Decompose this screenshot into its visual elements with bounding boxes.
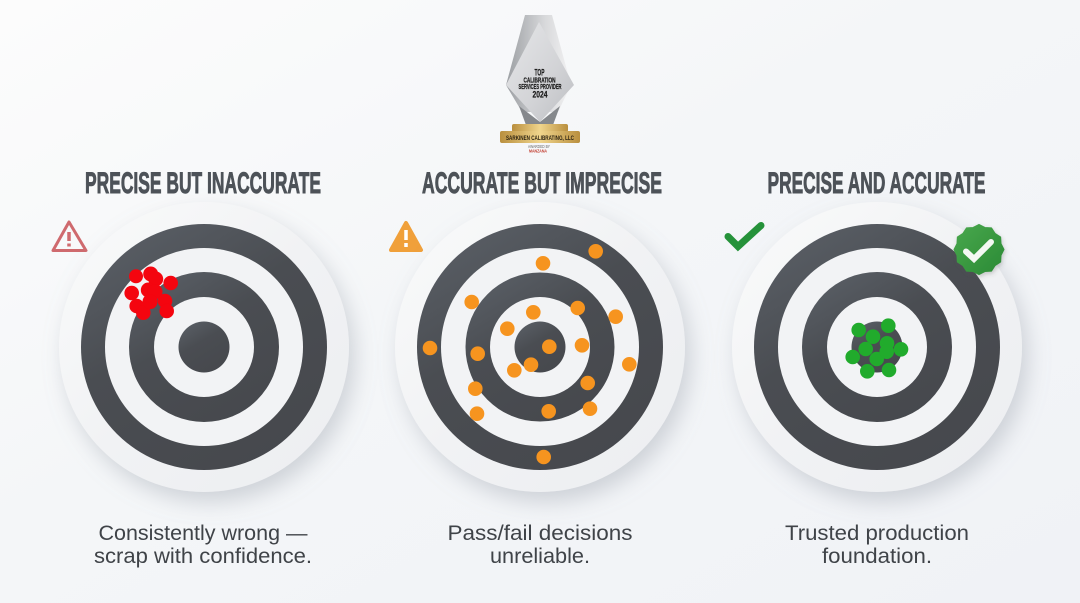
award trophy: SERVICES PROVIDER bbox=[518, 84, 562, 91]
award trophy: CALIBRATION bbox=[524, 76, 556, 84]
caption: consistently wrong: scrap with confidence. bbox=[94, 544, 312, 568]
target: red cluster off-center bbox=[59, 202, 349, 492]
award trophy: MANZANA bbox=[529, 148, 548, 154]
caption: consistently wrong: Consistently wrong — bbox=[98, 521, 308, 545]
caption: pass/fail: Pass/fail decisions bbox=[448, 521, 632, 545]
heading: accurate but imprecise: ACCURATE BUT IMPRECISE bbox=[422, 167, 662, 200]
award trophy bbox=[500, 15, 580, 154]
panel: precise but inaccurate bbox=[53, 167, 349, 568]
icon: green check bbox=[728, 226, 761, 246]
heading: precise but inaccurate: PRECISE BUT INACCURATE bbox=[85, 167, 321, 200]
award trophy: AWARDED BY bbox=[528, 144, 550, 149]
shot cluster: green bbox=[845, 318, 908, 379]
award trophy: 2024 bbox=[532, 90, 548, 100]
icon: red warning outline bbox=[53, 222, 86, 250]
award trophy: SARKINEN CALIBRATING, LLC bbox=[506, 135, 574, 142]
target: green cluster centered bbox=[732, 202, 1022, 492]
icon: green seal badge with check bbox=[954, 224, 1004, 274]
caption: pass/fail: unreliable. bbox=[490, 544, 590, 568]
caption: trusted production: foundation. bbox=[822, 544, 932, 568]
panel: accurate but imprecise bbox=[391, 167, 685, 568]
shot scatter: orange bbox=[423, 244, 637, 464]
icon: orange warning solid bbox=[391, 223, 421, 250]
panel: precise and accurate bbox=[728, 167, 1022, 568]
target: orange scatter bbox=[395, 202, 685, 492]
award trophy: TOP bbox=[534, 68, 544, 78]
caption: trusted production: Trusted production bbox=[785, 521, 969, 545]
shot cluster: red bbox=[124, 266, 178, 320]
